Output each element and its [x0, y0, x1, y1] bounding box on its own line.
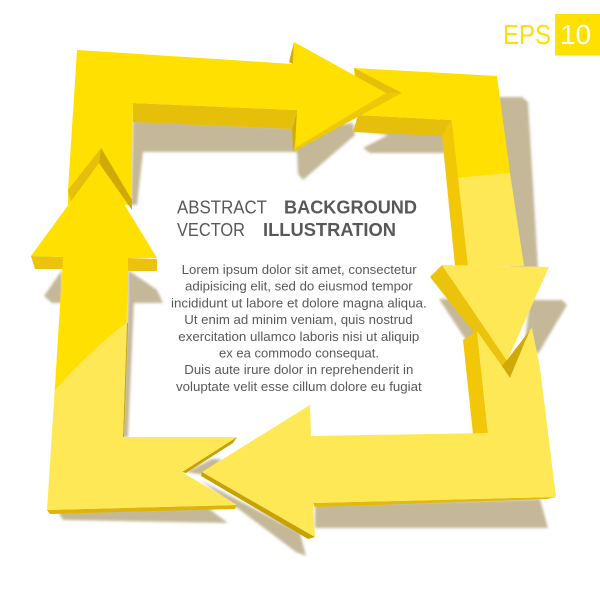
- body text: incididunt ut labore et dolore magna aliqua.: [171, 295, 427, 310]
- body text: ex ea commodo consequat.: [219, 346, 379, 360]
- EPS 10 badge: EPS: [503, 19, 551, 50]
- left depth: [31, 256, 63, 269]
- chevron depth left: [68, 148, 101, 202]
- body text: Ut enim ad minim veniam, quis nostrud: [184, 312, 413, 327]
- notch depth: [502, 330, 530, 378]
- body text: exercitation ullamco laboris nisi ut aliquip: [178, 329, 419, 344]
- body text: adipisicing elit, sed do eiusmod tempor: [185, 279, 413, 294]
- body text: voluptate velit esse cillum dolore eu fugiat: [176, 379, 422, 394]
- heading: [177, 196, 417, 240]
- notch depth: [182, 437, 237, 473]
- body text: Duis aute irure dolor in reprehenderit in: [184, 362, 413, 377]
- face light: [47, 290, 237, 510]
- bottom edge: [313, 497, 556, 507]
- heading: ILLUSTRATION: [263, 219, 396, 240]
- EPS 10 badge: 10: [560, 19, 591, 50]
- arrow: top side, top left corner pointing right: [68, 42, 402, 205]
- vertical depth strip: [463, 331, 488, 434]
- face: [202, 328, 556, 537]
- arrow: bottom side, bottom right corner pointing left: [201, 328, 556, 539]
- chevron depth right: [99, 148, 132, 210]
- notch depth at tail of head: [292, 110, 297, 152]
- body text: [171, 262, 427, 394]
- upper notch depth: [289, 42, 294, 64]
- head and shaft: [31, 163, 157, 292]
- arrow: head of left arrow overlapping top corner: [31, 148, 157, 292]
- arrow: right side, top right corner pointing down: [353, 68, 549, 378]
- head depth: [201, 472, 315, 539]
- right depth: [128, 258, 157, 271]
- heading: VECTOR: [177, 219, 245, 240]
- dark yellow shaft: [354, 68, 510, 178]
- cast shadows: [44, 97, 567, 556]
- face dark: [55, 290, 128, 390]
- EPS 10 badge: [503, 14, 600, 56]
- arrow: left side, bottom left corner pointing up: [47, 290, 237, 514]
- face: [68, 42, 386, 205]
- tail notch depth: [354, 68, 402, 93]
- heading: BACKGROUND: [284, 196, 417, 218]
- arrow head: [442, 265, 549, 361]
- body text: Lorem ipsum dolor sit amet, consectetur: [182, 262, 417, 277]
- shaft depth: [133, 103, 297, 129]
- light yellow shaft: [458, 173, 524, 266]
- inner depth strips: [353, 115, 452, 136]
- head lower depth: [293, 93, 402, 152]
- right thin edge: [123, 323, 128, 437]
- heading: ABSTRACT: [177, 196, 267, 218]
- arrow head depth: [430, 265, 510, 378]
- bottom edge: [47, 505, 237, 514]
